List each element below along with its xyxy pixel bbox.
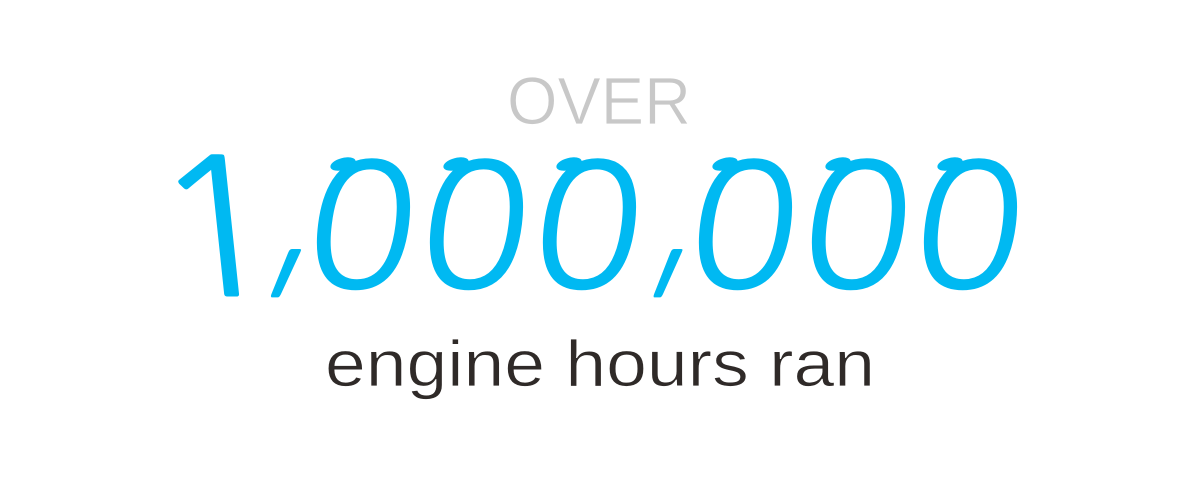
caption: engine hours ran: engine hours ran — [325, 327, 875, 400]
big number: 1,000,000: 0 — [903, 140, 1036, 315]
big number: 1,000,000: 1 — [142, 133, 293, 324]
big number: 1,000,000 — [142, 63, 1036, 324]
big number: 1,000,000: , — [643, 63, 740, 298]
big number: 1,000,000: , — [260, 65, 359, 298]
big number: 1,000,000: 0 — [678, 140, 811, 315]
big number: 1,000,000: 0 — [296, 140, 429, 315]
big number: 1,000,000: 0 — [791, 140, 924, 315]
big number: 1,000,000: 0 — [522, 140, 655, 315]
heading: OVER: OVER — [507, 64, 691, 139]
big number: 1,000,000: 0 — [409, 140, 542, 315]
